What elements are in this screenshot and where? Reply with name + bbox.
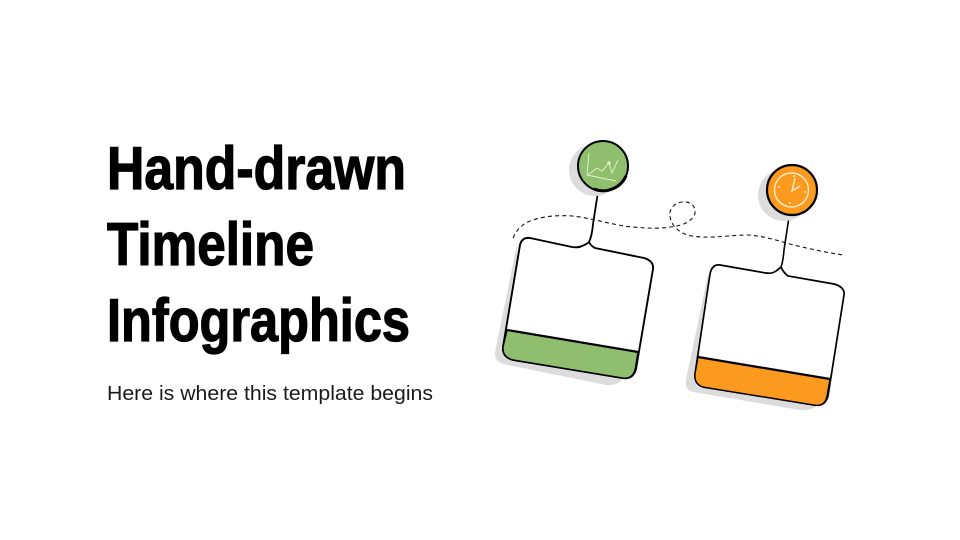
card 2: orange timeline card [686,265,844,410]
card 2 orange footer [695,357,830,405]
title: Infographics [107,287,410,354]
circle 2 fill [767,165,817,215]
card 2 divider [698,357,830,379]
clock glyph [774,173,808,207]
title: Timeline [107,211,314,278]
circle 1 heavy edge [594,176,626,191]
circle 1 fill [578,141,628,191]
title: Hand-drawn [107,135,406,202]
card 1: green timeline card [495,238,653,385]
circle 1 shadow [569,144,621,196]
card 1 green footer [503,330,638,378]
card 2 white body [695,265,844,405]
card 1 shadow [495,244,622,385]
line chart glyph [587,153,618,181]
card 1 white body [503,238,653,378]
connector 2 [781,217,789,267]
icon: orange clock circle [758,165,817,221]
title [107,135,410,354]
card 2 shadow [686,274,818,410]
circle 2 shadow [758,169,810,221]
subtitle: Here is where this template begins [107,382,433,405]
connector 1 [589,192,598,242]
dashed timeline path [513,202,843,255]
card 1 divider [507,330,638,352]
icon: green chart circle [569,141,628,196]
